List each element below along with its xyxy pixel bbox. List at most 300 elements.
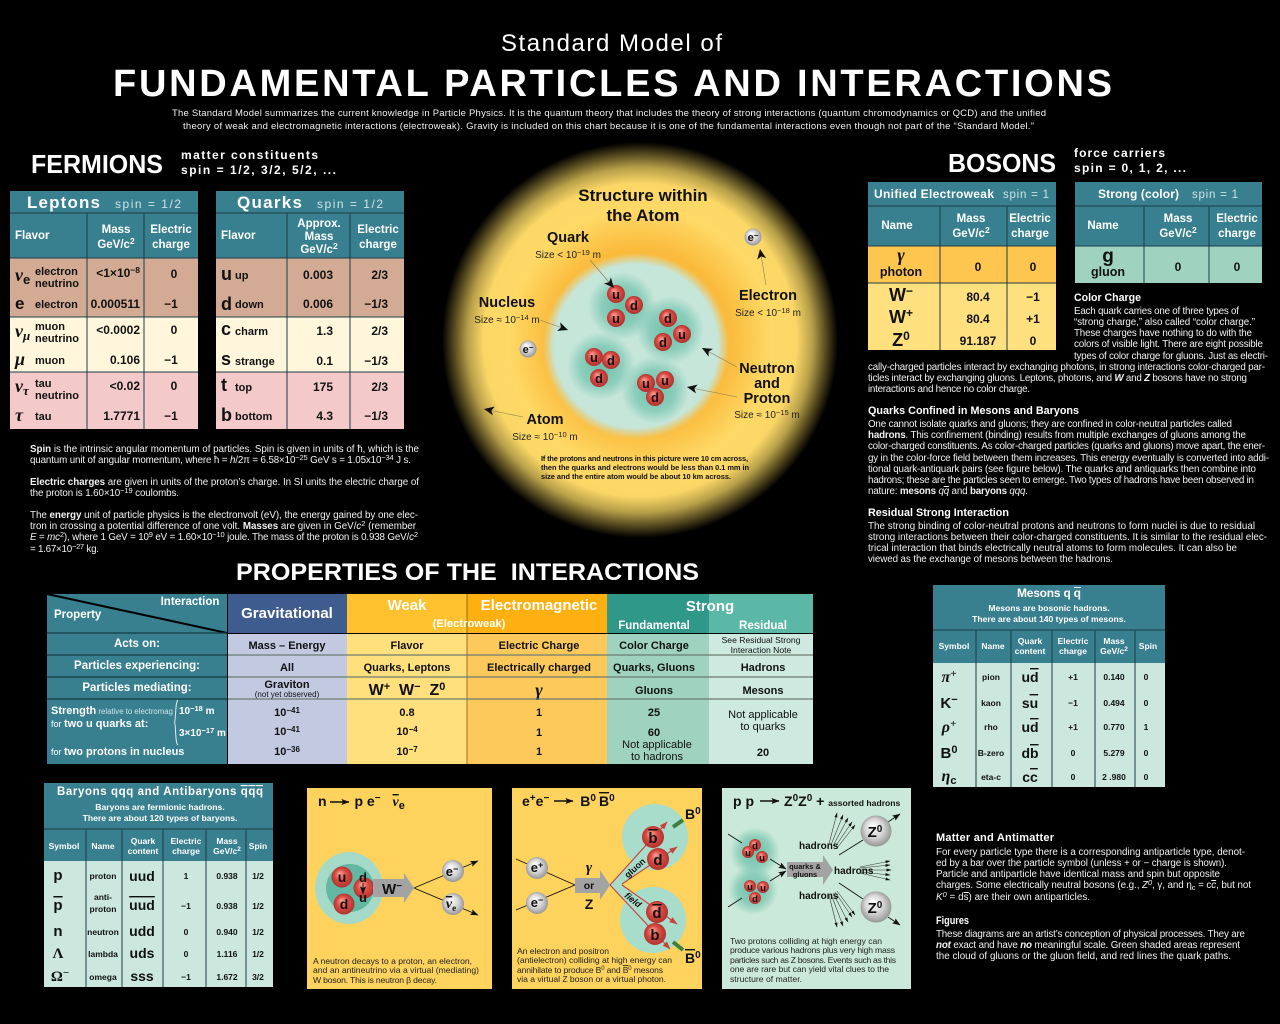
lepton rows: tau	[35, 411, 52, 423]
caption	[313, 956, 479, 985]
lepton rows: −8	[130, 265, 140, 275]
text: matter and antimatter: = c	[1195, 880, 1211, 891]
quarks in nucleus: u	[678, 327, 686, 342]
panel: strong color table: 0	[1234, 260, 1241, 274]
atom labels: Atom	[526, 412, 564, 428]
column: weak: Quarks, Leptons	[364, 662, 450, 674]
quark rows: 2/3	[371, 268, 388, 282]
baryon rows: 1/2	[252, 871, 264, 881]
meson rows: 0	[1071, 748, 1076, 758]
quark rows: 0.003	[303, 268, 333, 282]
text: color charge: colors of visible light. There are eight possible	[1074, 339, 1264, 350]
meson rows: +	[950, 718, 956, 730]
quarks in nucleus: d	[664, 311, 672, 326]
nucleus	[543, 253, 729, 439]
meson rows: B-zero	[978, 748, 1004, 758]
atom heading	[578, 186, 708, 225]
text: spin, charges, energy notes: The energy unit of particle physics is the electronvolt (eV), the energy gained by one elec-	[30, 510, 418, 521]
meson rows: ρ	[942, 719, 950, 736]
panel: mesons table: Mesons are bosonic hadrons.	[988, 603, 1110, 613]
heading: bosons: spin = 0, 1, 2, ...	[1074, 161, 1186, 175]
meson rows: 0	[1144, 772, 1149, 782]
atom labels: and	[754, 376, 780, 392]
column: weak: 0	[439, 681, 445, 693]
panel: baryons table: charge	[172, 846, 200, 856]
meson rows	[940, 668, 1149, 787]
lepton rows: electron	[35, 266, 78, 278]
quarks in nucleus: u	[661, 373, 669, 388]
quark rows: −1/3	[364, 409, 388, 423]
panel: baryons table: Mass	[216, 836, 238, 846]
caption: annihilate to produce B	[517, 965, 601, 975]
column: gravitational: −41	[286, 706, 300, 715]
atom labels: −14	[516, 313, 529, 322]
quark rows: b	[221, 405, 232, 425]
B meson outputs	[673, 806, 701, 966]
produced quarks	[642, 826, 669, 945]
meson rows: 0	[1071, 772, 1076, 782]
baryon rows: n	[53, 923, 63, 940]
produced quarks: b	[648, 830, 658, 847]
text: quarks confined: hadrons. This confinement (binding) results from multiple exchanges of gluons among the	[868, 430, 1247, 441]
column: strong fundamental: Gluons	[635, 685, 673, 697]
property column: m	[203, 706, 215, 717]
electroweak rows: W	[889, 285, 906, 305]
panel: leptons table: charge	[152, 239, 190, 251]
column: weak	[347, 594, 467, 764]
column: weak: −	[414, 681, 421, 693]
text: residual strong interaction: viewed as the exchange of mesons between the hadrons.	[868, 554, 1113, 565]
caption: Two protons colliding at high energy can	[730, 936, 882, 946]
column: strong fundamental	[607, 594, 709, 764]
baryon rows	[51, 867, 264, 985]
column: gravitational: (not yet observed)	[255, 690, 320, 699]
text: spin, charges, energy notes: −27	[72, 542, 84, 551]
property column: Strength relative to electromag	[51, 705, 173, 717]
meson rows: 1	[1144, 722, 1149, 732]
panel: quarks table: GeV/c	[300, 244, 333, 256]
electroweak label: (Electroweak)	[433, 618, 506, 630]
caption: produce various hadrons plus very high mass	[730, 945, 895, 955]
text: quarks confined: Quarks Confined in Mesons and Baryons	[868, 405, 1079, 417]
field labels: gluon	[623, 856, 647, 880]
baryon rows: 1/2	[252, 901, 264, 911]
text: spin, charges, energy notes: J s.	[394, 455, 411, 466]
caption: and an antineutrino via a virtual (mediating)	[313, 965, 479, 975]
colliding protons: u	[745, 848, 751, 859]
virtual photon or Z arrow: γ	[586, 860, 593, 876]
column: weak: Z	[421, 682, 439, 699]
meson rows: −	[951, 694, 958, 706]
baryon rows: 0	[184, 949, 189, 959]
lepton rows: τ	[23, 383, 30, 398]
Z bosons: Z	[868, 824, 877, 841]
atom footnote: then the quarks and electrons would be less than 0.1 mm in	[541, 463, 749, 472]
meson rows: π	[941, 669, 950, 686]
quark rows: 0.006	[303, 297, 333, 311]
column: strong residual: Hadrons	[741, 662, 785, 674]
text: spin, charges, energy notes: = 1.67×10	[30, 544, 73, 555]
incoming particles: −	[538, 895, 543, 905]
column: strong fundamental: Not applicable	[622, 739, 692, 751]
text: quarks confined	[868, 405, 1269, 497]
quark rows: d	[221, 294, 232, 314]
lepton rows: e	[23, 272, 30, 287]
field labels: field	[623, 890, 644, 910]
meson rows: η	[942, 768, 950, 785]
panel: unified electroweak table	[868, 182, 1056, 350]
quarks in nucleus: u	[612, 311, 620, 326]
panel: strong color table: gluon	[1091, 265, 1125, 279]
electroweak rows: W	[889, 307, 906, 327]
atom labels: Quark	[547, 230, 590, 246]
atom labels: m	[590, 250, 601, 261]
panel: baryons table: Baryons qqq and Antibaryons qqq	[57, 786, 263, 798]
baryon rows: uds	[130, 945, 155, 961]
baryon rows: lambda	[88, 949, 118, 959]
meson rows: 0	[1144, 672, 1149, 682]
meson rows: 0.770	[1103, 722, 1125, 732]
Z bosons: 0	[877, 900, 883, 911]
panel: baryons table: content	[128, 846, 159, 856]
intro text: The Standard Model summarizes the current knowledge in Particle Physics. It is the quantum theory that includes the theory of strong interactions (quantum chromodynamics or QCD) and the unified	[172, 108, 1046, 119]
meson rows: −1	[1068, 698, 1078, 708]
meson rows: +1	[1068, 722, 1078, 732]
text: matter and antimatter: = d	[947, 892, 964, 903]
column: electromagnetic: Electromagnetic	[481, 597, 597, 614]
caption: 0	[628, 966, 632, 972]
caption: structure of matter.	[730, 974, 802, 984]
atom footnote	[541, 454, 749, 481]
title	[113, 30, 1112, 105]
lepton rows: −1	[164, 353, 178, 367]
caption: one are rare but can yield vital clues to the	[730, 964, 889, 974]
B meson outputs: B	[685, 806, 695, 822]
quarks in nucleus: d	[659, 335, 667, 350]
quarks in nucleus: u	[590, 350, 598, 365]
electroweak rows: 0	[1030, 260, 1037, 274]
quarks in nucleus: d	[630, 298, 638, 313]
panel: neutron decay: n p e	[318, 793, 375, 809]
atom labels	[474, 230, 801, 443]
W boson arrow	[373, 873, 414, 903]
text: color charge: These charges have nothing to do with the	[1074, 328, 1253, 339]
panel: baryons table: Quark	[131, 836, 156, 846]
panel: strong color table: Mass	[1164, 213, 1192, 225]
panel: electron positron annihilation: B	[580, 793, 590, 809]
column: weak: 10	[396, 746, 409, 758]
text: matter and antimatter: , γ, and η	[1152, 880, 1192, 891]
lepton rows: neutrino	[35, 390, 79, 402]
panel: proton collision	[722, 788, 911, 989]
heading: properties of the interactions: PROPERTIES OF THE INTERACTIONS	[236, 559, 699, 586]
panel: unified electroweak table: Name	[881, 220, 913, 232]
meson rows: eta-c	[981, 772, 1001, 782]
panel: mesons table: content	[1015, 646, 1046, 656]
column: gravitational: Gravitational	[241, 605, 333, 622]
lepton rows: 0.000511	[91, 297, 140, 311]
column: gravitational: All	[280, 662, 294, 674]
panel: proton collision: Z	[798, 793, 807, 809]
panel: mesons table: Symbol	[939, 641, 969, 651]
baryon rows: omega	[89, 972, 117, 982]
caption: W boson. This is neutron β decay.	[313, 975, 437, 985]
baryon rows: 0.940	[216, 927, 238, 937]
lepton rows: −1	[164, 409, 178, 423]
electrons	[520, 228, 762, 358]
property column: Particles experiencing:	[74, 660, 200, 672]
panel: mesons table: charge	[1059, 646, 1087, 656]
property column: Acts on:	[114, 638, 160, 650]
caption	[730, 936, 896, 984]
electroweak rows: γ	[897, 245, 905, 265]
property column: for two u quarks at:	[51, 718, 148, 730]
column: weak: W	[369, 682, 384, 699]
panel: mesons table: 2	[1124, 646, 1128, 653]
text: matter and antimatter: c	[1192, 883, 1196, 892]
panel: electron positron annihilation: 0	[590, 793, 596, 804]
quarks in nucleus: u	[642, 376, 650, 391]
panel: leptons table: Flavor	[15, 230, 50, 242]
text: quarks confined: hadrons; these are the particles seen to emerge. Two types of hadrons have been observed in	[868, 475, 1254, 486]
text: spin, charges, energy notes: GeV s = 1.05x10	[308, 455, 382, 466]
panel: strong color table: Strong (color)	[1098, 187, 1179, 201]
text: residual strong interaction: The strong binding of color-neutral protons and neutrons to form nuclei is due to residual	[868, 521, 1255, 532]
atom labels: Size ≈ 10	[474, 315, 516, 326]
text: figures: not exact and have no meaningful scale. Green shaded areas represent	[936, 940, 1240, 951]
panel: mesons table: There are about 140 types of mesons.	[972, 614, 1126, 624]
column: gravitational: Mass – Energy	[248, 640, 326, 652]
column: strong fundamental: Color Charge	[619, 640, 689, 652]
heading: fermions	[31, 148, 336, 179]
panel: baryons table	[44, 783, 273, 987]
panel: mesons table: Quark	[1018, 636, 1043, 646]
panel: strong color table: 0	[1175, 260, 1182, 274]
text: spin, charges, energy notes: −10	[212, 530, 225, 539]
atom labels: Proton	[744, 391, 790, 407]
panel: neutron decay: −	[375, 793, 381, 804]
text: spin, charges, energy notes: tron in crossing a potential difference of one volt. Masses are given in GeV/c	[30, 521, 361, 532]
text: spin, charges, energy notes: joule. The mass of the proton is 0.938 GeV/	[225, 532, 410, 543]
panel: mesons table: Electric	[1058, 636, 1089, 646]
column: weak: Weak	[388, 597, 427, 614]
intro text	[172, 108, 1046, 132]
text: spin, charges, energy notes: E = mc	[30, 532, 60, 543]
caption: via a virtual Z boson or a virtual photon.	[517, 974, 666, 984]
quarks: d	[340, 896, 348, 912]
column: strong residual: Mesons	[743, 685, 783, 697]
panel: baryons table: Name	[91, 841, 115, 851]
column: strong fundamental: Fundamental	[618, 620, 690, 632]
produced quarks: d	[653, 852, 663, 869]
text: matter and antimatter: For every particle type there is a corresponding antiparticle type, denot-	[936, 847, 1245, 858]
meson rows: 0.140	[1103, 672, 1125, 682]
hadron labels: hadrons	[834, 866, 874, 877]
quarks in nucleus: d	[595, 371, 603, 386]
quark rows: 175	[313, 380, 333, 394]
baryon rows: sss	[130, 968, 154, 984]
lepton rows: 0	[171, 323, 178, 337]
caption: and	[604, 965, 623, 975]
text: spin, charges, energy notes: −19	[120, 486, 133, 495]
text: color charge: types of color charge for gluons. Just as electri-	[1074, 351, 1268, 362]
quarks: u	[338, 869, 346, 885]
incoming particles: +	[538, 860, 543, 870]
column: weak: 10	[396, 726, 409, 738]
panel: baryons table: Symbol	[49, 841, 79, 851]
colliding protons: d	[752, 894, 758, 905]
text: matter and antimatter: 0	[1148, 878, 1153, 887]
hadron labels: hadrons	[799, 841, 839, 852]
panel: proton collision: assorted hadrons	[828, 798, 901, 808]
quark rows: t	[221, 375, 227, 395]
incoming particles: e	[531, 860, 538, 875]
meson rows: pion	[982, 672, 1000, 682]
atom labels: Size < 10	[735, 308, 777, 319]
strong heading: Strong	[686, 598, 734, 615]
text: residual strong interaction	[868, 507, 1267, 565]
panel: baryons table: GeV/c	[213, 846, 237, 856]
quark rows: −1/3	[364, 297, 388, 311]
panel: mesons table: Mass	[1103, 636, 1125, 646]
atom labels: m	[529, 315, 540, 326]
caption: An electron and positron	[517, 946, 609, 956]
neutron cloud	[315, 852, 383, 924]
panel: strong color table: Name	[1087, 220, 1119, 232]
baryon rows: p	[53, 897, 63, 914]
baryon rows: 0.938	[216, 901, 238, 911]
electroweak rows: 80.4	[966, 290, 990, 304]
panel: neutron decay: e	[399, 800, 405, 812]
heading: bosons	[948, 146, 1186, 178]
incoming particles: e	[531, 895, 538, 910]
quarks: u	[359, 890, 367, 905]
text: spin, charges, energy notes: kg.	[84, 544, 99, 555]
panel: baryons table: Electric	[171, 836, 202, 846]
panel: quarks table: Electric	[357, 224, 399, 236]
property column: m	[214, 728, 226, 739]
panel: neutron decay: ν	[393, 795, 400, 810]
lepton rows: μ	[14, 349, 25, 369]
baryon rows: uud	[129, 897, 155, 913]
meson rows: +1	[1068, 672, 1078, 682]
meson rows: 0	[951, 744, 957, 756]
atom labels: Size ≈ 10	[734, 410, 776, 421]
panel: quarks table: 2	[333, 241, 338, 251]
field labels	[623, 856, 647, 910]
panel: electron positron annihilation: e	[536, 793, 544, 809]
Z bosons: 0	[877, 824, 883, 835]
atom footnote: size and the entire atom would be about 10 km across.	[541, 472, 731, 481]
panel: electron positron annihilation: B	[599, 793, 609, 809]
panel: unified electroweak table: charge	[1011, 228, 1049, 240]
text: spin, charges, energy notes: −25	[295, 453, 308, 462]
baryon rows: proton	[90, 871, 116, 881]
electrons: −	[529, 343, 534, 352]
text: spin, charges, energy notes: (remember	[365, 521, 417, 532]
panel: proton collision: 0	[807, 793, 813, 804]
meson rows: c	[950, 775, 956, 787]
quarks and gluons arrow: quarks &	[789, 862, 821, 871]
panel: baryons table: Baryons are fermionic hadrons.	[95, 802, 225, 812]
lepton rows: 1.7771	[103, 409, 140, 423]
quark rows: down	[235, 299, 264, 311]
quarks and gluons arrow	[787, 855, 833, 885]
hadron labels: hadrons	[799, 891, 839, 902]
atom labels: Size < 10	[535, 250, 577, 261]
text: figures: the cloud of gluons or the gluon field, and red lines the quark paths.	[936, 951, 1231, 962]
meson rows: 5.279	[1103, 748, 1125, 758]
baryon rows: −	[63, 967, 69, 979]
lepton rows: 0.106	[110, 353, 140, 367]
text: matter and antimatter: 0	[943, 890, 948, 899]
colliding protons: u	[747, 882, 753, 893]
meson rows: +	[950, 668, 957, 680]
baryon rows: Ω	[51, 969, 63, 985]
incoming particles	[516, 857, 575, 914]
text: color charge: Color Charge	[1074, 292, 1141, 304]
lepton rows: ν	[15, 321, 23, 341]
gluon field	[610, 804, 688, 953]
panel: unified electroweak table: Unified Electroweak	[874, 187, 994, 201]
quark rows: 2/3	[371, 324, 388, 338]
lepton rows: muon	[35, 321, 65, 333]
panel: proton collision: +	[812, 793, 828, 809]
meson rows: 2 .980	[1102, 772, 1126, 782]
quarks	[326, 864, 374, 914]
panel: proton collision: 0	[793, 793, 799, 804]
baryon rows: 3/2	[252, 972, 264, 982]
panel: strong color table: charge	[1218, 228, 1256, 240]
property column: 3×10	[179, 728, 202, 739]
hadron labels	[799, 841, 874, 902]
column: weak: W	[390, 682, 415, 699]
text: spin, charges, energy notes: eV = 1.60×10	[153, 532, 213, 543]
baryon rows: neutron	[87, 927, 119, 937]
text: color charge: cally-charged particles interact by exchanging photons, in strong interactions color-charged par-	[868, 362, 1265, 373]
column: strong residual: Interaction Note	[731, 645, 792, 655]
text: spin, charges, energy notes: ), where 1 GeV = 10	[64, 532, 149, 543]
text: matter and antimatter: c, but not	[1211, 880, 1251, 891]
title: Standard Model of	[501, 30, 722, 57]
quarks in nucleus: u	[612, 287, 620, 302]
Z bosons: Z	[868, 900, 877, 917]
panel: quarks table: Approx.	[297, 218, 341, 230]
lepton rows: −1	[164, 297, 178, 311]
text: spin, charges, energy notes: coulombs.	[133, 488, 179, 499]
colliding protons: d	[752, 841, 758, 852]
electroweak rows: 80.4	[966, 312, 990, 326]
column: weak: +	[384, 681, 390, 693]
heading: bosons: BOSONS	[948, 148, 1056, 178]
panel: quarks table	[216, 191, 404, 429]
column: strong residual: Residual	[739, 620, 787, 632]
meson rows: cc	[1022, 769, 1038, 785]
column: strong residual	[709, 594, 813, 764]
column: gravitational: 10	[274, 726, 286, 738]
panel: leptons table: Electric	[150, 224, 192, 236]
caption: B	[623, 965, 629, 975]
lepton rows: e	[15, 294, 24, 313]
baryon rows: anti-	[94, 892, 112, 902]
text: residual strong interaction: trical interaction that binds electrically neutral atoms to form molecules. It can also be	[868, 543, 1238, 554]
meson rows: 0	[1144, 698, 1149, 708]
column: electromagnetic: γ	[535, 680, 543, 700]
atom labels: −15	[776, 408, 789, 417]
arrow: reaction	[554, 800, 573, 802]
lepton rows: <0.02	[110, 379, 140, 393]
text: spin, charges, energy notes: 2	[361, 519, 365, 528]
